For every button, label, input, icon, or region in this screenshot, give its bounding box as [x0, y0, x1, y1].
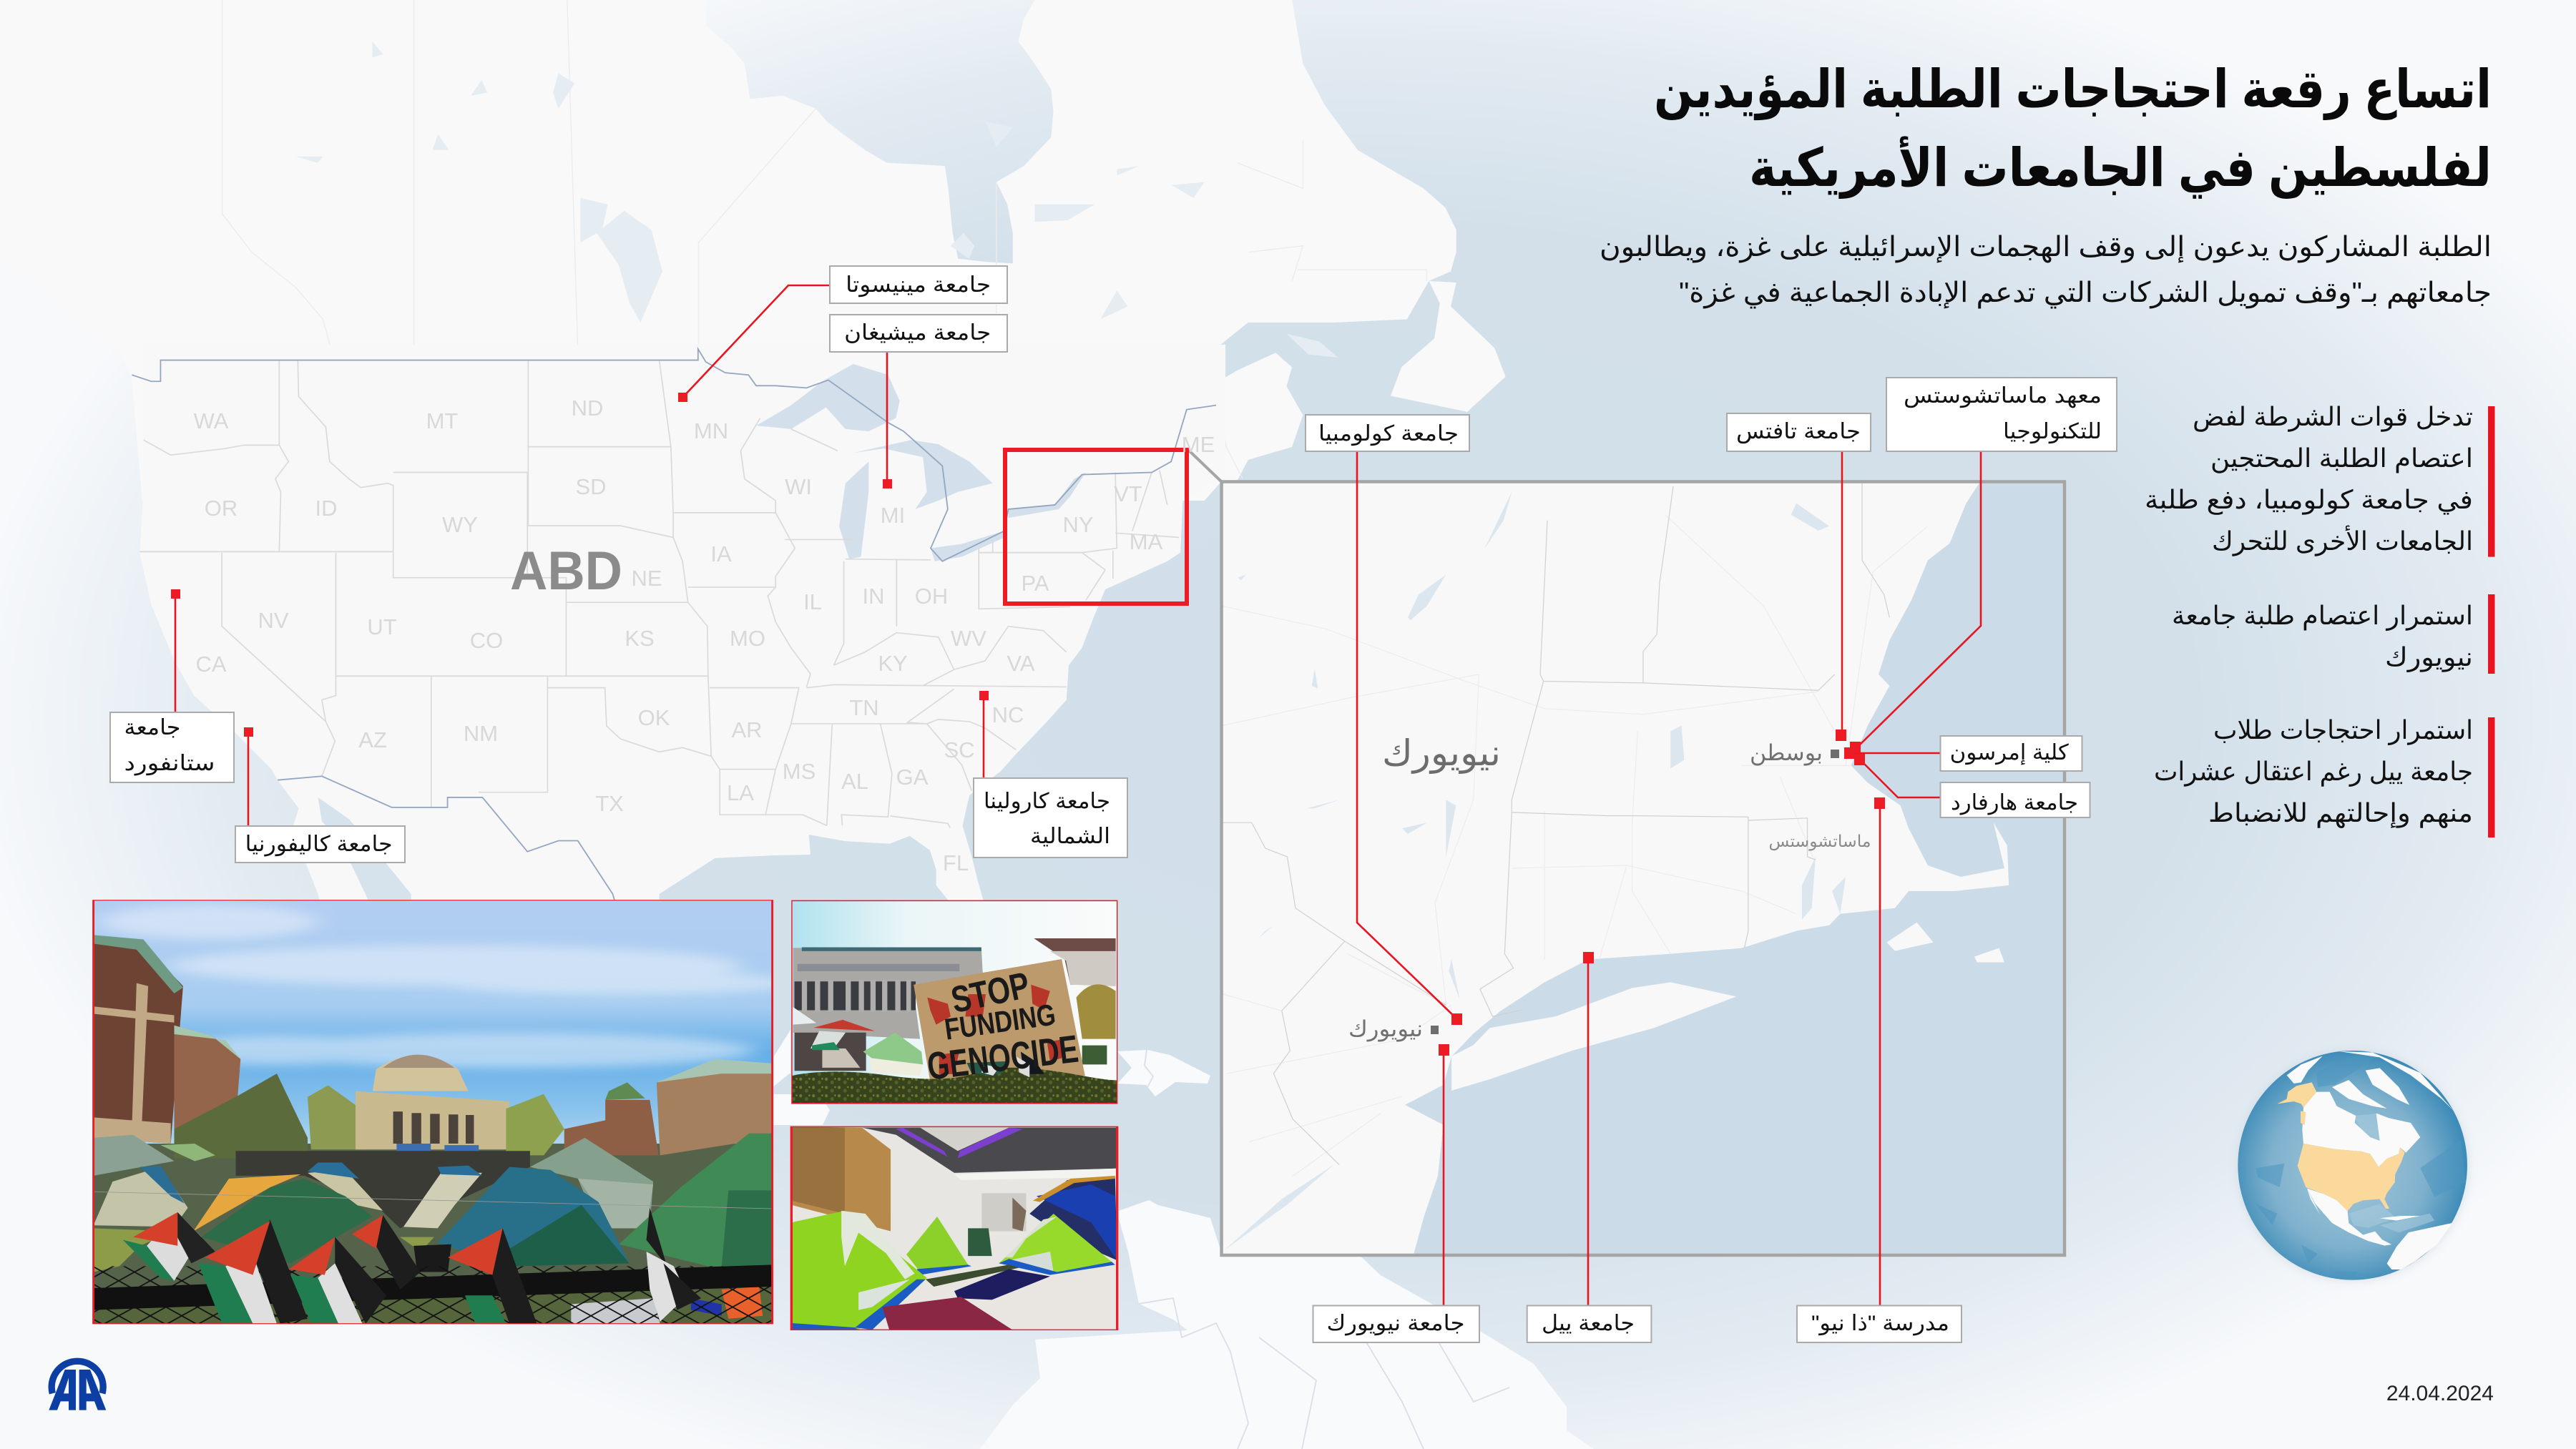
label: Stanford University: جامعة	[124, 716, 180, 740]
label: The New School	[1797, 1306, 1962, 1342]
state abbreviations: NV	[258, 608, 289, 633]
country label ABD: ABD	[510, 541, 622, 601]
photo: Stop Funding Genocide sign	[792, 900, 1132, 1104]
label: University of Michigan: جامعة ميشيغان	[844, 321, 991, 345]
label: Yale University: جامعة ييل	[1542, 1312, 1635, 1335]
label: Harvard University: جامعة هارفارد	[1951, 791, 2078, 815]
state abbreviations: NY	[1062, 512, 1094, 537]
base map: North America	[0, 0, 1594, 1449]
state abbreviations: LA	[727, 780, 754, 805]
connector from locator box to inset	[1187, 449, 1221, 481]
state abbreviations: MA	[1130, 529, 1163, 554]
key point: police intervention at Columbia: تدخل قوات الشرطة لفض	[2193, 402, 2473, 432]
state abbreviations: TX	[595, 791, 624, 816]
label: MIT	[1886, 378, 2117, 451]
date: 24.04.2024	[2386, 1382, 2494, 1405]
state abbreviations: OK	[638, 705, 670, 730]
state abbreviations: UT	[367, 614, 397, 639]
university markers: inset map	[1439, 730, 1885, 1056]
state abbreviations: AR	[731, 717, 763, 742]
key point: police intervention at Columbia	[2145, 402, 2495, 557]
label: Tufts University	[1727, 413, 1871, 451]
subtitle: جامعاتهم بـ"وقف تمويل الشركات التي تدعم الإبادة الجماعية في غزة"	[1679, 277, 2492, 309]
label: Harvard University	[1940, 782, 2090, 817]
state abbreviations: AL	[841, 769, 868, 794]
inset place labels	[1348, 733, 1871, 1042]
label: University of North Carolina: الشمالية	[1030, 825, 1110, 848]
state abbreviations: CA	[195, 652, 227, 677]
state abbreviations: WA	[194, 408, 229, 433]
leader lines: main map	[175, 285, 984, 826]
state abbreviations: FL	[943, 850, 969, 875]
map: Great Lakes	[756, 364, 1086, 561]
label: New York University: جامعة نيويورك	[1326, 1312, 1465, 1335]
label: Emerson College	[1940, 736, 2082, 771]
locator box: New England area	[1005, 450, 1187, 604]
subtitle: الطلبة المشاركون يدعون إلى وقف الهجمات الإسرائيلية على غزة، ويطالبون	[1600, 232, 2492, 263]
state abbreviations: WV	[951, 626, 986, 651]
globe land masses	[2287, 1051, 2454, 1269]
title: لفلسطين في الجامعات الأمريكية	[1749, 136, 2492, 199]
label: University of Minnesota	[830, 266, 1007, 303]
label: MIT: معهد ماساتشوستس	[1904, 384, 2102, 408]
label: University of Minnesota: جامعة مينيسوتا	[846, 273, 991, 297]
key point: NYU sit-in continues: نيويورك	[2385, 642, 2473, 672]
inset map: New York and New England	[1221, 481, 2065, 1256]
photo: indoor tents	[791, 1126, 1117, 1330]
state abbreviations: VA	[1007, 651, 1035, 676]
state abbreviations: WI	[785, 474, 812, 499]
map: Caribbean and South America land	[773, 1030, 1594, 1449]
sign text: FUNDING	[942, 998, 1057, 1046]
state abbreviations: KS	[625, 626, 655, 651]
state abbreviations: SD	[575, 474, 607, 499]
state abbreviations: SC	[944, 737, 975, 762]
state abbreviations: NC	[992, 702, 1024, 727]
key point: Yale protests continue	[2154, 715, 2495, 838]
state abbreviations: CO	[470, 628, 503, 653]
state abbreviations: KY	[878, 651, 908, 676]
university markers: main map	[171, 393, 989, 737]
map: United States landmass with state borders	[132, 345, 1225, 925]
label: Yale University	[1527, 1306, 1651, 1342]
key point: police intervention at Columbia: الجامعات الأخرى للتحرك	[2212, 525, 2473, 556]
label: The New School: مدرسة "ذا نيو"	[1811, 1312, 1949, 1335]
label: Columbia University: جامعة كولومبيا	[1318, 422, 1459, 446]
label: Stanford University: ستانفورد	[124, 752, 215, 775]
label: Columbia University	[1306, 415, 1469, 451]
state abbreviations: MS	[783, 759, 816, 784]
state abbreviations: GA	[896, 765, 929, 790]
key point: police intervention at Columbia: اعتصام الطلبة المحتجين	[2210, 443, 2473, 473]
key point: Yale protests continue: منهم وإحالتهم للانضباط	[2208, 798, 2473, 828]
state abbreviations: ND	[572, 396, 603, 421]
state abbreviations: IA	[710, 541, 732, 566]
leader lines: inset map	[1357, 451, 1981, 1306]
logo: Anadolu Agency	[49, 1361, 106, 1410]
key point: police intervention at Columbia: في جامعة كولومبيا، دفع طلبة	[2145, 485, 2473, 515]
title	[1654, 59, 2492, 199]
state abbreviations: VT	[1114, 481, 1142, 506]
sign text: GENOCIDE	[925, 1027, 1081, 1089]
state abbreviations: MN	[694, 418, 728, 443]
inset place labels: نيويورك	[1348, 1016, 1423, 1042]
label: Stanford University	[110, 712, 234, 782]
label: University of California	[235, 826, 405, 863]
state abbreviations: MO	[730, 626, 765, 651]
key point: Yale protests continue: استمرار احتجاجات طلاب	[2213, 715, 2473, 745]
inset place labels: بوسطن	[1750, 740, 1823, 766]
state abbreviations: ID	[315, 496, 338, 521]
sign text: STOP	[948, 965, 1033, 1021]
inset place labels: نيويورك	[1382, 733, 1501, 774]
state abbreviations: OR	[205, 496, 237, 521]
label: University of Michigan	[830, 315, 1007, 352]
state abbreviations: IL	[803, 589, 822, 614]
label: University of North Carolina	[974, 778, 1127, 858]
inset place labels: ماساتشوستس	[1768, 832, 1871, 851]
key point: NYU sit-in continues	[2172, 594, 2495, 674]
label: New York University	[1313, 1306, 1479, 1342]
key point: Yale protests continue: جامعة ييل رغم اعتقال عشرات	[2154, 757, 2473, 787]
label: University of North Carolina: جامعة كارولينا	[984, 790, 1110, 814]
inset frame	[1222, 482, 2065, 1255]
state abbreviations: OH	[915, 584, 948, 609]
subtitle	[1600, 232, 2492, 309]
globe highlight: United States	[2277, 1082, 2405, 1211]
key point: NYU sit-in continues: استمرار اعتصام طلبة جامعة	[2172, 601, 2473, 631]
sign text	[925, 965, 1081, 1089]
label: Tufts University: جامعة تافتس	[1736, 420, 1861, 443]
state abbreviations: ME	[1182, 432, 1215, 457]
state abbreviations: WY	[442, 512, 478, 537]
photo: tents on Columbia lawn	[94, 900, 797, 1325]
state abbreviations: MT	[426, 408, 458, 433]
label: MIT: للتكنولوجيا	[2003, 420, 2102, 443]
state abbreviations: TN	[849, 695, 879, 720]
state abbreviations: AZ	[358, 727, 387, 752]
state abbreviations: PA	[1021, 571, 1049, 596]
state abbreviations: IN	[863, 584, 884, 609]
state abbreviations	[194, 396, 1215, 875]
label: University of California: جامعة كاليفورنيا	[245, 832, 393, 856]
locator globe	[2237, 1050, 2469, 1282]
state abbreviations: MI	[881, 503, 905, 528]
label: Emerson College: كلية إمرسون	[1950, 741, 2069, 765]
state abbreviations: NE	[631, 566, 662, 591]
map: Canada landmass	[0, 0, 1506, 501]
state abbreviations: NM	[464, 721, 498, 746]
inset land	[1222, 481, 2009, 1256]
